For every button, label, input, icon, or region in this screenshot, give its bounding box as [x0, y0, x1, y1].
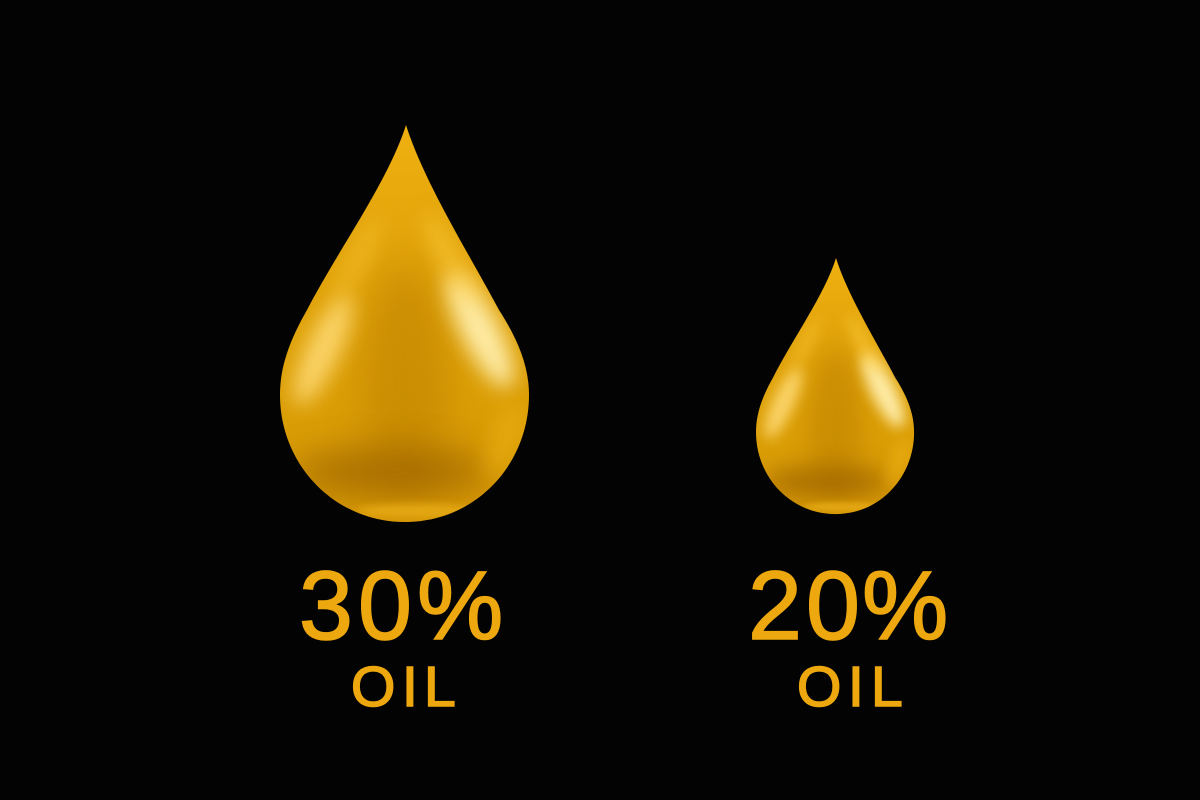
icon: large oil drop	[280, 125, 532, 522]
30% oil group	[280, 125, 532, 719]
value: 30%: 30%	[299, 551, 503, 660]
infographic canvas	[280, 125, 946, 708]
20% oil group	[748, 258, 948, 719]
icon: small oil drop	[756, 258, 916, 514]
label: OIL: OIL	[797, 655, 903, 719]
value: 20%: 20%	[748, 551, 948, 660]
label: OIL: OIL	[351, 655, 456, 719]
